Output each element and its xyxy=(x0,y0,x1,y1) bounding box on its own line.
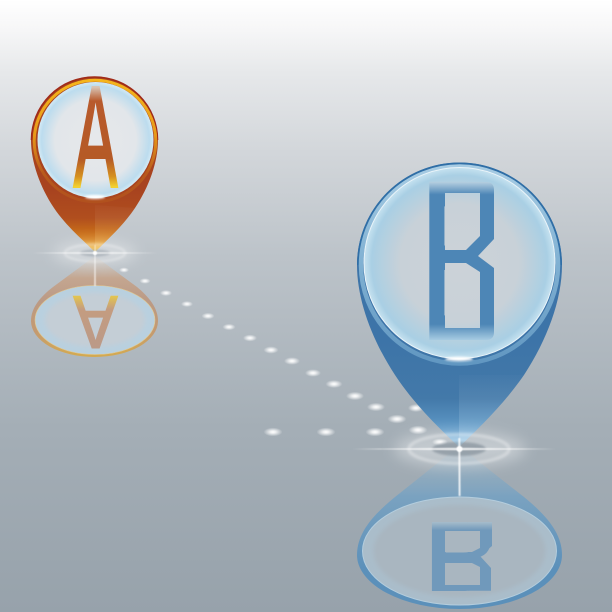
pin A xyxy=(31,57,158,252)
light flare B xyxy=(352,438,556,496)
letter B upper counter xyxy=(445,193,480,250)
ripple rings B xyxy=(409,434,509,464)
reflected letter A: A xyxy=(73,281,118,363)
ripple rings A xyxy=(65,244,125,262)
reflected pin body xyxy=(31,256,158,357)
pin A highlight xyxy=(85,195,105,199)
pin B light ring xyxy=(361,166,558,364)
reflected letter B shoulders xyxy=(468,522,492,591)
light flare A xyxy=(32,245,158,286)
letter B lower counter xyxy=(445,263,480,328)
reflection of pin B xyxy=(357,446,562,612)
pin A body xyxy=(31,76,158,252)
reflected glass xyxy=(35,286,155,354)
reflected glass xyxy=(362,497,556,605)
pin B glass xyxy=(364,168,555,358)
pin A glass xyxy=(38,82,154,198)
pin A gold ring xyxy=(34,80,156,202)
reflected letter B lower counter xyxy=(445,563,480,585)
letter B: B xyxy=(422,132,498,389)
ground glow and ripple under pin B xyxy=(352,431,556,496)
pin A dark outer rim xyxy=(32,77,158,140)
pin B dark outer rim xyxy=(358,164,561,265)
letter A: A xyxy=(73,57,118,217)
letter B shoulders xyxy=(468,182,494,340)
pin B right facet xyxy=(459,375,524,447)
reflection of pin A xyxy=(31,256,158,363)
ground glow and ripple under pin A xyxy=(32,241,158,286)
reflected pin body xyxy=(357,446,562,609)
reflected letter B: B xyxy=(426,501,495,612)
reflected letter B upper counter xyxy=(445,531,480,552)
pin A right facet xyxy=(95,205,135,252)
pin B highlight xyxy=(445,357,473,361)
pin B xyxy=(357,132,562,447)
pin B body xyxy=(357,162,562,447)
dotted route from A to B xyxy=(119,267,448,446)
